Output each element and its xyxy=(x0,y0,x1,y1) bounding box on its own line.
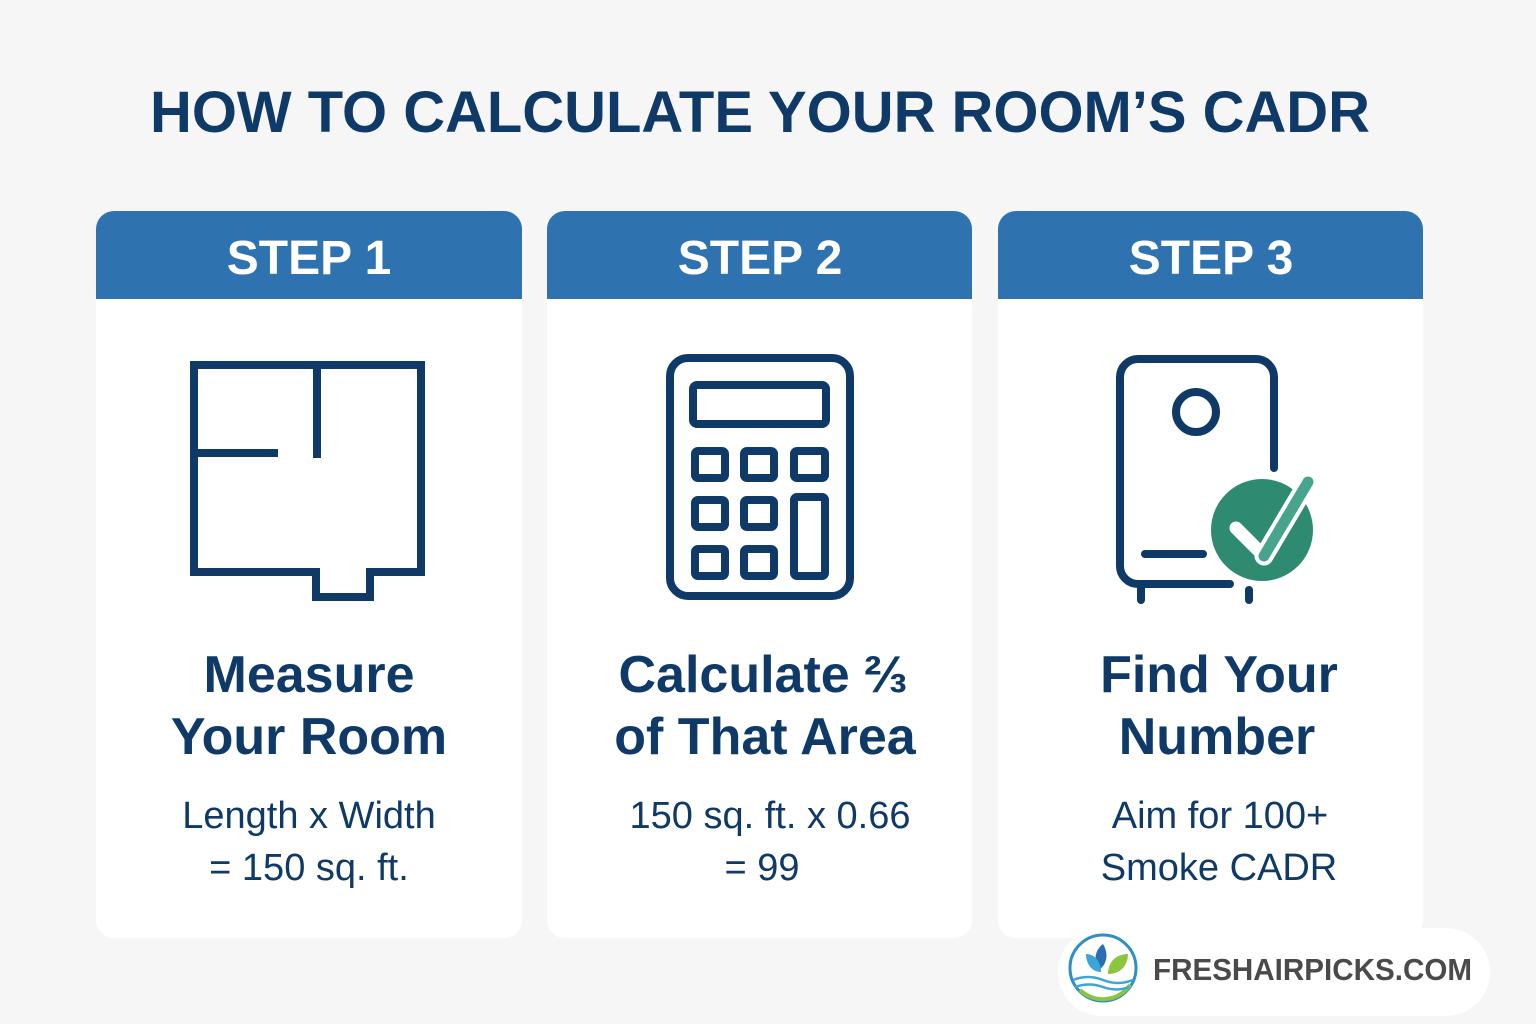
step 2 text: 150 sq. ft. x 0.66 xyxy=(630,795,910,837)
icon: air purifier with check xyxy=(1120,359,1313,600)
logo text: FRESHAIRPICKS.COM xyxy=(1153,952,1472,987)
step 1 text: = 150 sq. ft. xyxy=(209,847,409,889)
icon: floor plan xyxy=(194,365,421,597)
step 2 heading: Calculate ⅔ xyxy=(618,646,908,704)
icon: logo xyxy=(1070,935,1136,1001)
panel: step 2 xyxy=(547,211,972,938)
step 1 header: STEP 1 xyxy=(227,232,391,285)
step 3 header xyxy=(998,211,1423,299)
step 3 heading: Number xyxy=(1119,708,1315,766)
panel: step 1 xyxy=(96,211,522,938)
step 3 text: Aim for 100+ xyxy=(1112,795,1328,837)
icon: calculator xyxy=(670,358,850,596)
step 2 header xyxy=(547,211,972,299)
step 3 header: STEP 3 xyxy=(1129,232,1293,285)
step 3 heading: Find Your xyxy=(1100,646,1338,704)
title: HOW TO CALCULATE YOUR ROOM’S CADR xyxy=(150,80,1370,145)
panel: step 3 xyxy=(998,211,1423,938)
step 1 text: Length x Width xyxy=(182,795,436,837)
step 1 header xyxy=(96,211,522,299)
step 2 header: STEP 2 xyxy=(678,232,842,285)
step 3 text: Smoke CADR xyxy=(1101,847,1337,889)
step 2 text: = 99 xyxy=(724,847,800,889)
step 1 heading: Measure xyxy=(204,646,414,704)
step 2 heading: of That Area xyxy=(614,708,917,766)
step 1 heading: Your Room xyxy=(171,708,447,766)
logo badge xyxy=(1058,928,1490,1016)
